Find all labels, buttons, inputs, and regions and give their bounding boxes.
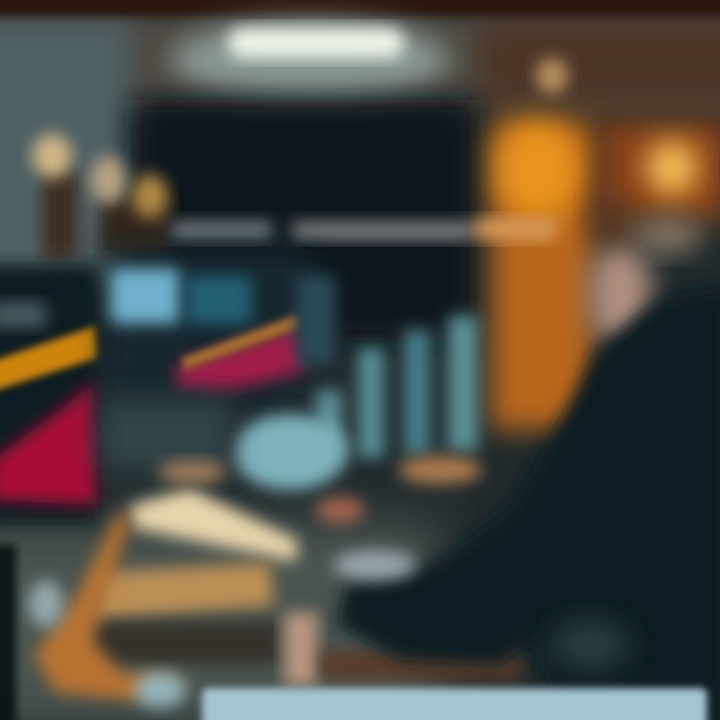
orange wall glow bbox=[490, 58, 720, 430]
wooden desk bbox=[28, 512, 520, 708]
teal bar chart bbox=[296, 275, 478, 458]
dark screen panel bbox=[135, 100, 475, 340]
ceiling light bbox=[170, 20, 450, 100]
lower left haze bbox=[100, 400, 230, 470]
left edge shadow bbox=[0, 545, 16, 720]
red chart area bbox=[0, 380, 96, 505]
head bbox=[588, 240, 652, 350]
orange chart band bbox=[0, 326, 97, 392]
hands bbox=[316, 456, 482, 580]
centre chart panel bbox=[106, 250, 311, 410]
blurred heading band bbox=[172, 218, 556, 240]
white desk paper bbox=[202, 688, 707, 720]
light blue blob bbox=[232, 414, 348, 490]
open book bbox=[130, 460, 298, 562]
left chart panel bbox=[0, 266, 98, 522]
red chart band bbox=[176, 326, 304, 390]
blue chart tile bbox=[110, 268, 180, 324]
person silhouette bbox=[338, 196, 720, 720]
blurred lamps on left bbox=[32, 134, 170, 260]
jacket bbox=[338, 285, 720, 720]
